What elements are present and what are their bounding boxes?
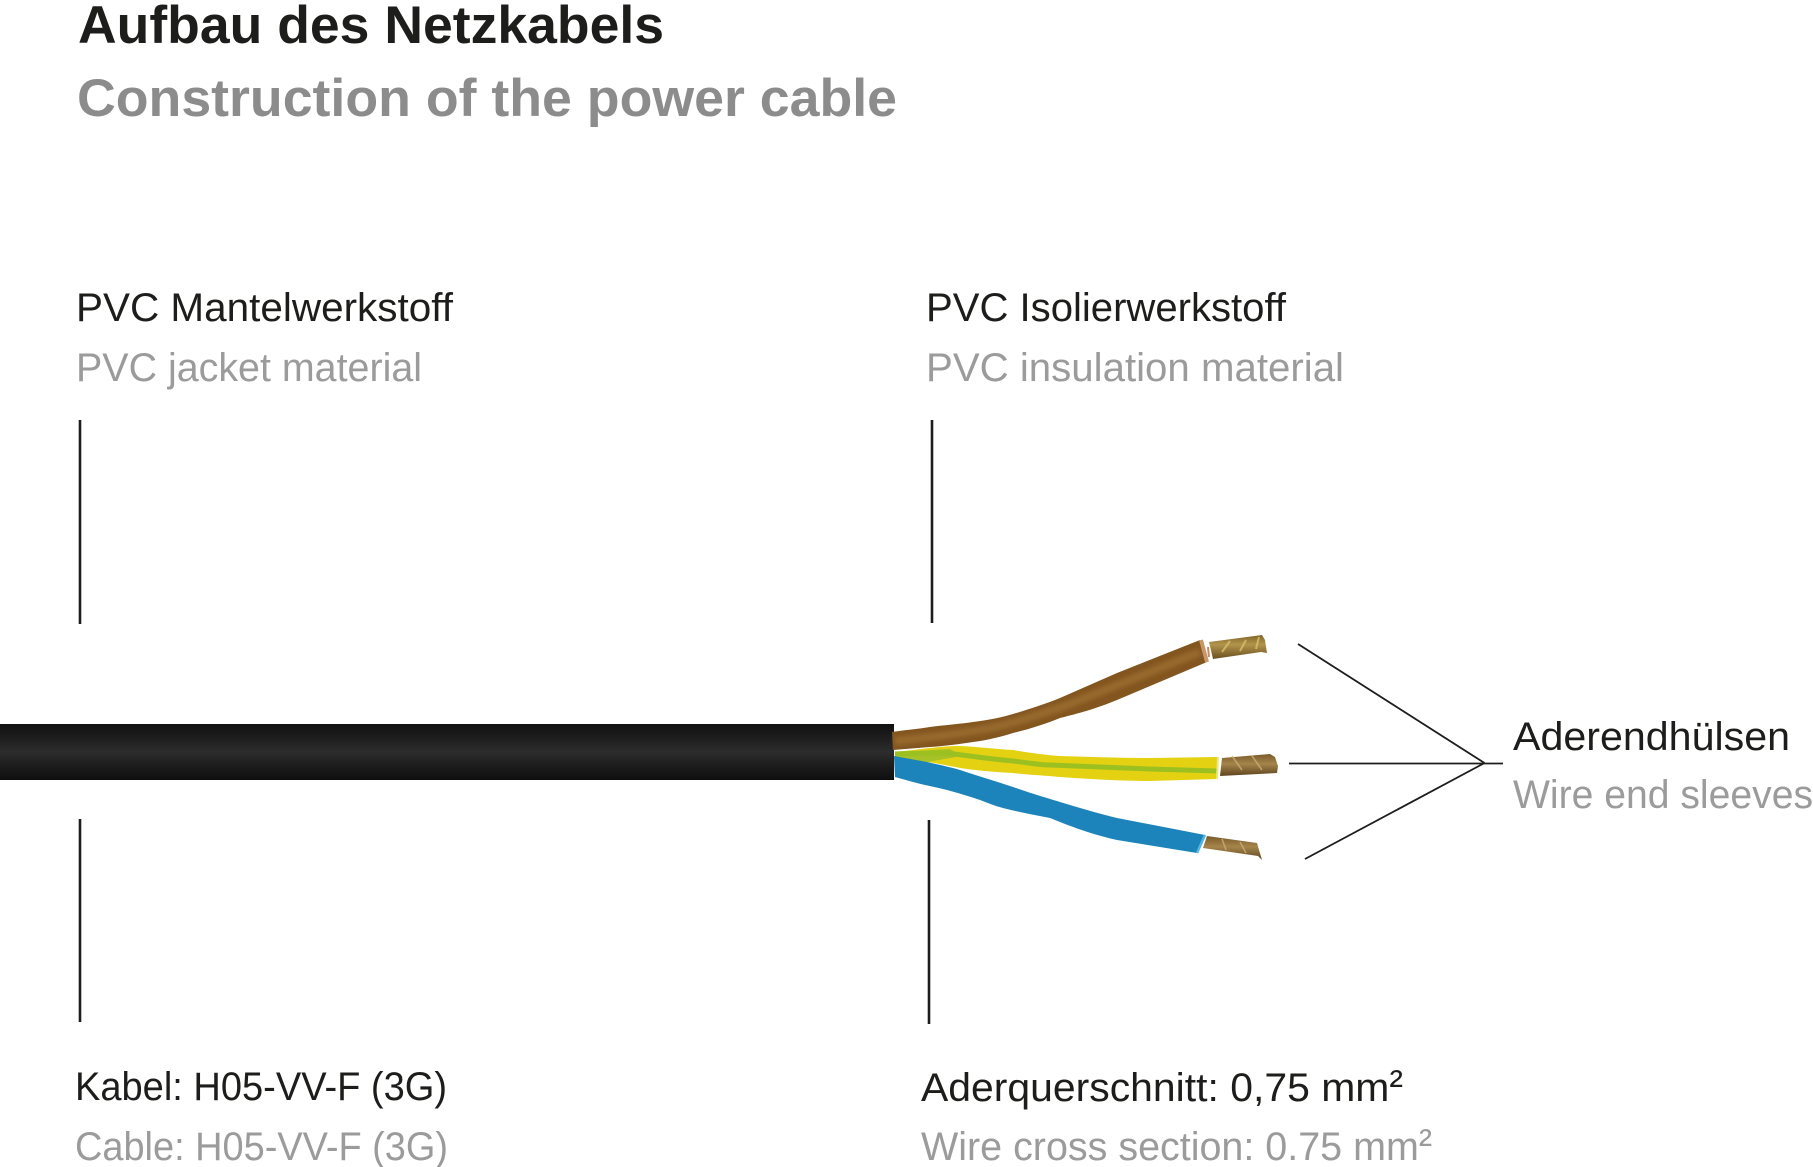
label: wire end sleeves (1513, 715, 1813, 817)
label: jacket material (76, 286, 454, 390)
pointer: jacket material (79, 420, 81, 624)
label: insulation material (926, 286, 1344, 390)
label: wire cross section (921, 1063, 1432, 1167)
title: English: Construction of the power cable (77, 69, 897, 128)
label: jacket material: PVC Mantelwerkstoff (76, 286, 454, 330)
label: insulation material: PVC Isolierwerkstoff (926, 286, 1287, 330)
wire: blue (894, 756, 1205, 853)
label: cable type (75, 1065, 448, 1167)
label: insulation material: PVC insulation material (926, 346, 1344, 390)
cable jacket (0, 724, 894, 780)
wire: brown (892, 640, 1207, 750)
illustration: power cable (0, 635, 1278, 860)
pointer: wire cross section (928, 820, 930, 1024)
label: cable type: Kabel: H05-VV-F (3G) (75, 1065, 447, 1109)
pointer: cable type (79, 819, 81, 1022)
wire sleeve: blue (1203, 836, 1262, 860)
label: jacket material: PVC jacket material (76, 346, 422, 390)
wire sleeve: yellow-green (1220, 754, 1278, 776)
label: wire end sleeves: Aderendhülsen (1513, 715, 1790, 759)
wire sleeve: brown (1208, 635, 1267, 659)
pointer: wire end sleeves (1289, 644, 1503, 859)
label: wire end sleeves: Wire end sleeves (1513, 773, 1813, 817)
label: wire cross section: ² (1389, 1063, 1403, 1107)
pointer: insulation material (931, 420, 933, 623)
label: wire cross section: ² (1419, 1122, 1432, 1166)
wire: yellow-green (895, 746, 1218, 781)
label: wire cross section: Aderquerschnitt: 0,75 mm (921, 1066, 1379, 1110)
